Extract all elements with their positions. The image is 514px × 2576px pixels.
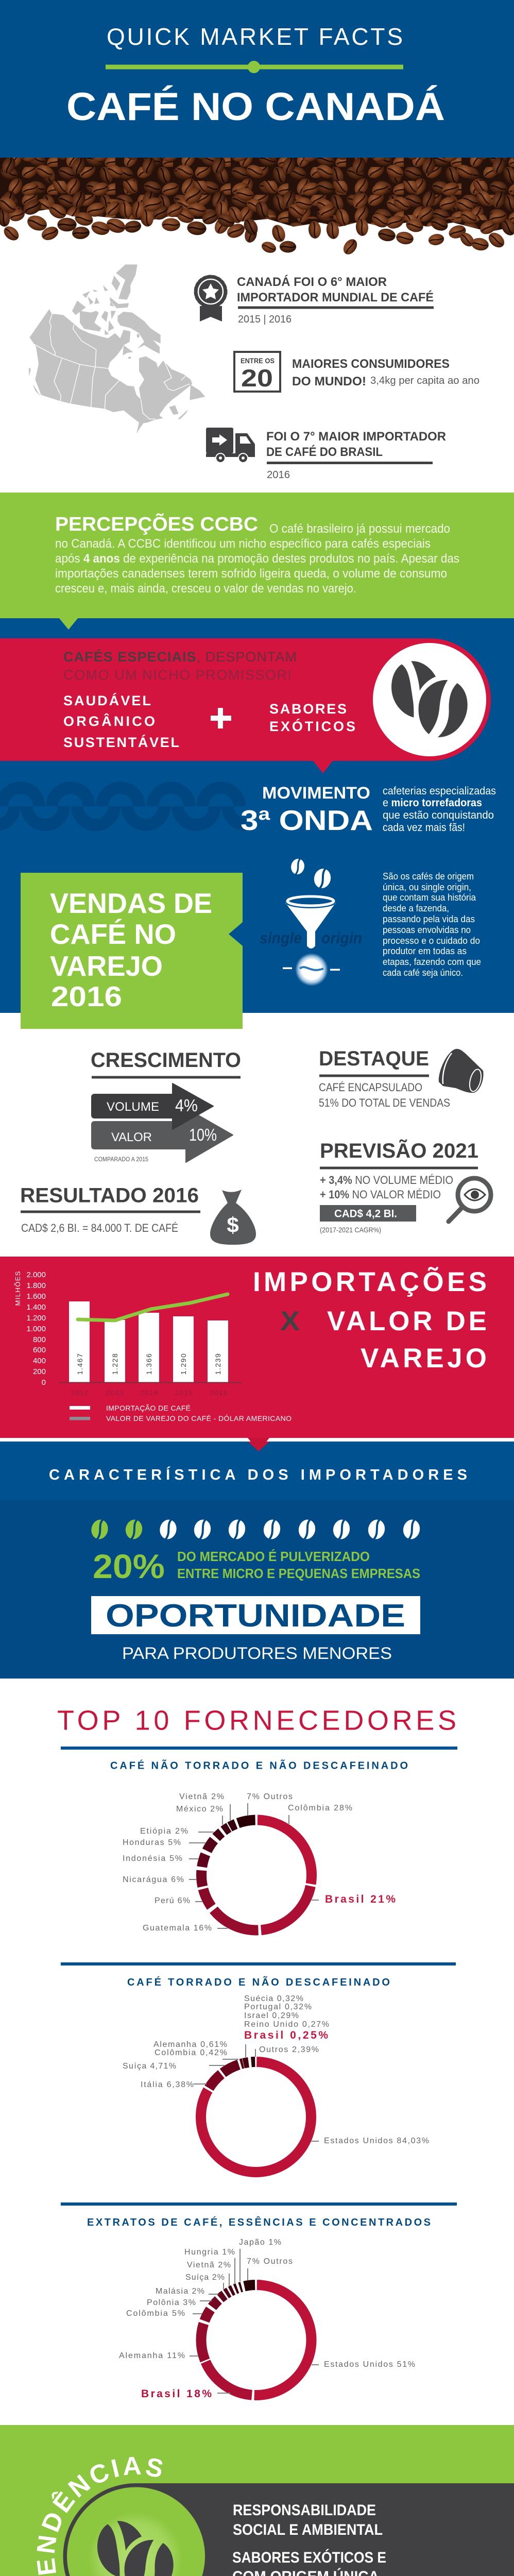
text: importer rank bbox=[237, 275, 434, 304]
icon: coffee capsule bbox=[439, 1049, 484, 1093]
heading: vendas: CAFÉ NO bbox=[50, 918, 176, 950]
icon: truck bbox=[206, 428, 255, 463]
text: single origin description: única, ou single origin, bbox=[383, 882, 471, 892]
text: compared to: COMPARADO A 2015 bbox=[94, 1156, 148, 1163]
heading: top 10 fornecedores: TOP 10 FORNECEDORES bbox=[57, 1705, 456, 1736]
text: perceptions paragraph: cresceu e, mais ainda, cresceu o valor de vendas no varejo. bbox=[55, 582, 356, 596]
axis labels bbox=[26, 1270, 46, 1387]
text: perceptions paragraph: após 4 anos de experiência na promoção destes produtos no país. Apesar das bbox=[55, 552, 459, 566]
labels 2: Reino Unido 0,27% bbox=[244, 2020, 329, 2029]
heading: chart 1: CAFÉ NÃO TORRADO E NÃO DESCAFEINADO bbox=[110, 1760, 408, 1771]
icon: medal bbox=[195, 276, 226, 321]
arrow: volume: 4% bbox=[175, 1096, 198, 1115]
heading: crescimento: CRESCIMENTO bbox=[91, 1049, 241, 1072]
panel: crescimento bbox=[91, 1049, 241, 1163]
legend: VALOR DE VAREJO DO CAFÉ - DÓLAR AMERICANO bbox=[106, 1414, 292, 1422]
pattern: waves bbox=[0, 788, 265, 825]
labels 3: Hungria 1% bbox=[184, 2248, 235, 2257]
text: trends list: SABORES EXÓTICOS E bbox=[232, 2549, 386, 2566]
icons: ten beans bbox=[90, 1518, 422, 1540]
text: rank brazil: DE CAFÉ DO BRASIL bbox=[266, 445, 383, 459]
text: rank brazil bbox=[266, 430, 446, 459]
text: importer rank: IMPORTADOR MUNDIAL DE CAFÉ bbox=[237, 290, 434, 304]
years: 2013 bbox=[106, 1388, 124, 1397]
chart: donut 3 bbox=[201, 2285, 311, 2395]
labels 3: Alemanha 11% bbox=[119, 2351, 185, 2360]
text: movimento description: cafeterias especializadas bbox=[383, 785, 496, 797]
labels 3: Brasil 18% bbox=[141, 2388, 212, 2400]
arrow: valor: VALOR bbox=[111, 1130, 152, 1144]
heading: previsão: PREVISÃO 2021 bbox=[320, 1139, 478, 1162]
years: 2014 bbox=[140, 1388, 159, 1397]
axis labels: 0 bbox=[42, 1378, 46, 1387]
panel: cafés especiais bbox=[0, 638, 491, 773]
text: result: CAD$ 2,6 BI. = 84.000 T. DE CAFÉ bbox=[21, 1222, 178, 1234]
labels 1: 7% Outros bbox=[247, 1792, 293, 1801]
chart: bars and line bbox=[14, 1270, 242, 1397]
axis labels: 400 bbox=[33, 1357, 46, 1365]
icon: money bag bbox=[210, 1190, 256, 1245]
text: flavours bbox=[269, 701, 355, 734]
leader lines 2 bbox=[194, 2044, 319, 2141]
text: movimento description bbox=[383, 785, 496, 834]
heading: características: CARACTERÍSTICA DOS IMPORTADORES bbox=[49, 1466, 467, 1483]
icon: single origin funnel: origin bbox=[321, 929, 362, 947]
heading: resultado: RESULTADO 2016 bbox=[20, 1184, 199, 1207]
labels 1 bbox=[123, 1792, 396, 1933]
heading: top 10 fornecedores bbox=[57, 1705, 457, 1750]
labels 3: Polônia 3% bbox=[147, 2298, 196, 2307]
axis labels: 1.400 bbox=[26, 1303, 46, 1312]
badge: forecast value bbox=[320, 1205, 416, 1222]
heading: vendas: VAREJO bbox=[50, 950, 163, 982]
bar values: 1.290 bbox=[179, 1353, 187, 1375]
text: forecast: + 3,4% NO VOLUME MÉDIO bbox=[320, 1174, 453, 1187]
text: capsule share: 51% DO TOTAL DE VENDAS bbox=[319, 1096, 450, 1109]
leader lines 3 bbox=[190, 2249, 319, 2393]
text: single origin description: processo e o cuidado do bbox=[383, 936, 480, 946]
heading: percepções: PERCEPÇÕES CCBC bbox=[55, 513, 258, 535]
text: single origin description bbox=[383, 871, 481, 978]
axis labels: 1.600 bbox=[26, 1292, 46, 1301]
heading: importações x valor de varejo: VAREJO bbox=[361, 1343, 487, 1374]
labels 3: Malásia 2% bbox=[156, 2287, 204, 2296]
text: perceptions paragraph bbox=[55, 522, 459, 596]
heading: movimento 3ª onda: MOVIMENTO bbox=[262, 784, 370, 802]
labels 2: Suíça 4,71% bbox=[123, 2062, 176, 2071]
text: trends list bbox=[232, 2502, 457, 2576]
labels 2 bbox=[123, 1994, 429, 2145]
text: trends list: SOCIAL E AMBIENTAL bbox=[233, 2521, 383, 2538]
text: rank brazil: FOI O 7° MAIOR IMPORTADOR bbox=[266, 430, 446, 444]
bar values: 1.239 bbox=[214, 1353, 222, 1375]
text: year: 2016 bbox=[267, 469, 290, 481]
icon: calendar 20: ENTRE OS bbox=[241, 357, 275, 365]
labels 3: Vietnã 2% bbox=[187, 2261, 231, 2269]
text: single origin description: São os cafés de origem bbox=[383, 871, 474, 882]
labels 1: Indonésia 5% bbox=[123, 1854, 182, 1863]
axis labels: 2.000 bbox=[26, 1270, 46, 1279]
panel: extratos de café bbox=[87, 2216, 431, 2400]
heading: cafés especiais: CAFÉS ESPECIAIS, DESPONTAM bbox=[63, 649, 297, 665]
labels 3 bbox=[119, 2238, 415, 2400]
title: quick market facts: QUICK MARKET FACTS bbox=[107, 23, 403, 50]
text: capsule share bbox=[319, 1081, 450, 1109]
labels 2: Israel 0,29% bbox=[244, 2011, 299, 2020]
axis labels: 200 bbox=[33, 1367, 46, 1376]
heading: chart 2: CAFÉ TORRADO E NÃO DESCAFEINADO bbox=[127, 1976, 390, 1988]
text: perceptions paragraph: O café brasileiro já possui mercado bbox=[269, 522, 450, 536]
labels 1: México 2% bbox=[176, 1805, 223, 1814]
text: capsule share: CAFÉ ENCAPSULADO bbox=[319, 1081, 422, 1094]
text: cagr note: (2017-2021 CAGR%) bbox=[320, 1226, 381, 1234]
icon: calendar 20 bbox=[234, 352, 280, 392]
text: consumers: 3,4kg per capita ao ano bbox=[370, 375, 479, 386]
text: perceptions paragraph: importações canadenses terem sofrido ligeira queda, o volume de consumo bbox=[55, 567, 447, 581]
axis labels: 600 bbox=[33, 1346, 46, 1354]
heading: importações x valor de varejo: IMPORTAÇÕES bbox=[253, 1266, 487, 1297]
text: flavours: EXÓTICOS bbox=[269, 718, 355, 734]
legend bbox=[70, 1404, 292, 1422]
text: trends list: RESPONSABILIDADE bbox=[233, 2502, 376, 2519]
text: forecast bbox=[320, 1174, 453, 1201]
labels 3: 7% Outros bbox=[247, 2257, 293, 2266]
panel: café torrado bbox=[123, 1976, 429, 2172]
title: café no canadá: CAFÉ NO CANADÁ bbox=[66, 85, 445, 129]
labels 2: Estados Unidos 84,03% bbox=[324, 2137, 429, 2145]
legend: IMPORTAÇÃO DE CAFÉ bbox=[106, 1404, 191, 1412]
arrow: volume: VOLUME bbox=[107, 1100, 159, 1114]
text: consumers: MAIORES CONSUMIDORES bbox=[292, 357, 450, 371]
heading: cafés especiais bbox=[63, 649, 297, 683]
labels 2: Itália 6,38% bbox=[141, 2080, 194, 2089]
bar values: 1.467 bbox=[76, 1353, 84, 1375]
labels 1: Nicarágua 6% bbox=[123, 1875, 184, 1884]
panel: tendências bbox=[0, 2425, 514, 2576]
heading: importações x valor de varejo: VALOR DE bbox=[327, 1306, 487, 1336]
text: single origin description: que contam sua história bbox=[383, 892, 476, 903]
axis title: MILHÕES bbox=[14, 1271, 22, 1306]
heading: movimento 3ª onda bbox=[241, 784, 373, 836]
labels 2: Alemanha 0,61% bbox=[153, 2040, 227, 2049]
banner: oportunidade: OPORTUNIDADE bbox=[106, 1598, 405, 1634]
panel: destaque bbox=[319, 1047, 484, 1109]
bars bbox=[69, 1301, 228, 1382]
labels 2: Portugal 0,32% bbox=[244, 2003, 312, 2011]
icon: single origin funnel: single bbox=[260, 929, 302, 947]
axis labels: 800 bbox=[33, 1335, 46, 1344]
text: attributes bbox=[63, 692, 179, 750]
fact: 7th largest importer from Brazil bbox=[206, 428, 446, 481]
photo: coffee beans band bbox=[0, 158, 514, 257]
icon: magnifier with eye bbox=[449, 1178, 491, 1222]
bar values: 1.366 bbox=[145, 1353, 153, 1375]
bar values bbox=[76, 1353, 222, 1375]
axis labels: 1.000 bbox=[26, 1325, 46, 1333]
labels 3: Japão 1% bbox=[239, 2238, 281, 2247]
text: importer rank: CANADÁ FOI O 6° MAIOR bbox=[237, 275, 387, 289]
text: consumers: DO MUNDO! bbox=[292, 375, 366, 388]
text: single origin description: cada café seja único. bbox=[383, 968, 463, 978]
labels 1: Colômbia 28% bbox=[288, 1804, 352, 1812]
text: fragmented market: DO MERCADO É PULVERIZADO bbox=[177, 1549, 370, 1564]
labels 3: Colômbia 5% bbox=[126, 2309, 185, 2318]
labels 2: Suécia 0,32% bbox=[244, 1994, 303, 2003]
years bbox=[71, 1388, 228, 1397]
arrow: valor bbox=[92, 1108, 233, 1162]
heading: destaque: DESTAQUE bbox=[319, 1047, 429, 1070]
arrow: valor: 10% bbox=[189, 1125, 217, 1144]
text: movimento description: e micro torrefadoras bbox=[383, 797, 482, 809]
labels 2: Colômbia 0,42% bbox=[155, 2048, 227, 2057]
heading: vendas: 2016 bbox=[51, 980, 122, 1012]
text: single origin description: etapas, fazendo com que bbox=[383, 957, 481, 967]
text: forecast: + 10% NO VALOR MÉDIO bbox=[320, 1188, 441, 1201]
text: single origin description: produtor em todas as bbox=[383, 946, 467, 956]
badge: forecast value: CAD$ 4,2 BI. bbox=[334, 1208, 397, 1220]
heading: chart 3: EXTRATOS DE CAFÉ, ESSÊNCIAS E CONCENTRADOS bbox=[87, 2216, 431, 2228]
axis labels: 1.200 bbox=[26, 1314, 46, 1323]
divider with dot bbox=[106, 61, 403, 73]
leader lines 1 bbox=[189, 1803, 319, 1928]
labels 2: Brasil 0,25% bbox=[244, 2029, 328, 2041]
panel: característica dos importadores bbox=[0, 1442, 514, 1679]
labels 2: Outros 2,39% bbox=[259, 2045, 319, 2054]
icon: bean badge bbox=[67, 2487, 205, 2576]
icon: single origin funnel bbox=[260, 857, 362, 986]
heading: importações x valor de varejo bbox=[253, 1266, 487, 1374]
text: movimento description: cada vez mais fãs! bbox=[383, 822, 465, 834]
panel: blue background bbox=[0, 618, 514, 1013]
chart: donut 1 bbox=[201, 1820, 312, 1930]
icon: calendar 20: 20 bbox=[241, 364, 273, 392]
heading: vendas bbox=[50, 887, 212, 1012]
retail value line bbox=[78, 1294, 228, 1320]
text: smaller producers: PARA PRODUTORES MENORES bbox=[122, 1644, 392, 1663]
text: single origin description: pessoas envolvidas no bbox=[383, 925, 471, 935]
chart: donut 2 bbox=[201, 2062, 311, 2172]
text: flavours: SABORES bbox=[269, 701, 347, 717]
panel: vendas de café no varejo bbox=[21, 873, 243, 1029]
text: attributes: SUSTENTÁVEL bbox=[63, 734, 179, 750]
fact: 6th largest importer bbox=[195, 275, 434, 325]
labels 3: Estados Unidos 51% bbox=[324, 2360, 415, 2369]
labels 1: Vietnã 2% bbox=[179, 1792, 224, 1801]
text: fragmented market: ENTRE MICRO E PEQUENAS EMPRESAS bbox=[177, 1566, 420, 1581]
heading: movimento 3ª onda: 3ª ONDA bbox=[241, 804, 373, 836]
labels 1: Honduras 5% bbox=[123, 1838, 181, 1847]
stat: 20 percent: 20% bbox=[93, 1547, 165, 1585]
icon: money bag: $ bbox=[227, 1213, 239, 1237]
text: movimento description: que estão conquistando bbox=[383, 809, 494, 821]
text: years: 2015 | 2016 bbox=[238, 314, 292, 325]
text: consumers bbox=[292, 357, 479, 388]
text: attributes: ORGÂNICO bbox=[63, 713, 155, 729]
panel: importações x varejo bbox=[0, 1257, 514, 1451]
icon: coffee bean circle bbox=[373, 643, 486, 756]
arrow: volume bbox=[92, 1083, 213, 1129]
map: canada bbox=[29, 264, 205, 434]
text: perceptions paragraph: no Canadá. A CCBC identificou um nicho específico para cafés especiais bbox=[55, 537, 431, 551]
panel: previsão 2021 bbox=[320, 1139, 491, 1234]
panel: header bbox=[0, 0, 514, 158]
heading: importações x valor de varejo: X bbox=[280, 1306, 300, 1336]
text: single origin description: passando pela vida das bbox=[383, 914, 475, 924]
axis labels: 1.800 bbox=[26, 1281, 46, 1290]
bar values: 1.228 bbox=[111, 1353, 119, 1375]
icon: plus bbox=[211, 708, 231, 728]
labels 3: Suíça 2% bbox=[185, 2273, 225, 2282]
labels 1: Guatemala 16% bbox=[143, 1924, 212, 1933]
panel: café não torrado bbox=[110, 1760, 408, 1933]
labels 1: Brasil 21% bbox=[325, 1893, 396, 1905]
labels 1: Etiópia 2% bbox=[140, 1827, 188, 1836]
text: single origin description: desde a fazenda, bbox=[383, 903, 449, 913]
text: attributes: SAUDÁVEL bbox=[63, 692, 151, 708]
years: 2012 bbox=[71, 1388, 89, 1397]
heading: vendas: VENDAS DE bbox=[50, 887, 212, 919]
years: 2016 bbox=[210, 1388, 228, 1397]
years: 2015 bbox=[175, 1388, 193, 1397]
panel: resultado 2016 bbox=[20, 1184, 256, 1245]
fact: top 20 consumers bbox=[234, 352, 479, 392]
text: fragmented market bbox=[177, 1549, 420, 1581]
panel: percepções ccbc bbox=[0, 493, 514, 630]
heading: cafés especiais: COMO UM NICHO PROMISSOR! bbox=[63, 667, 292, 683]
labels 1: Perú 6% bbox=[155, 1896, 190, 1905]
